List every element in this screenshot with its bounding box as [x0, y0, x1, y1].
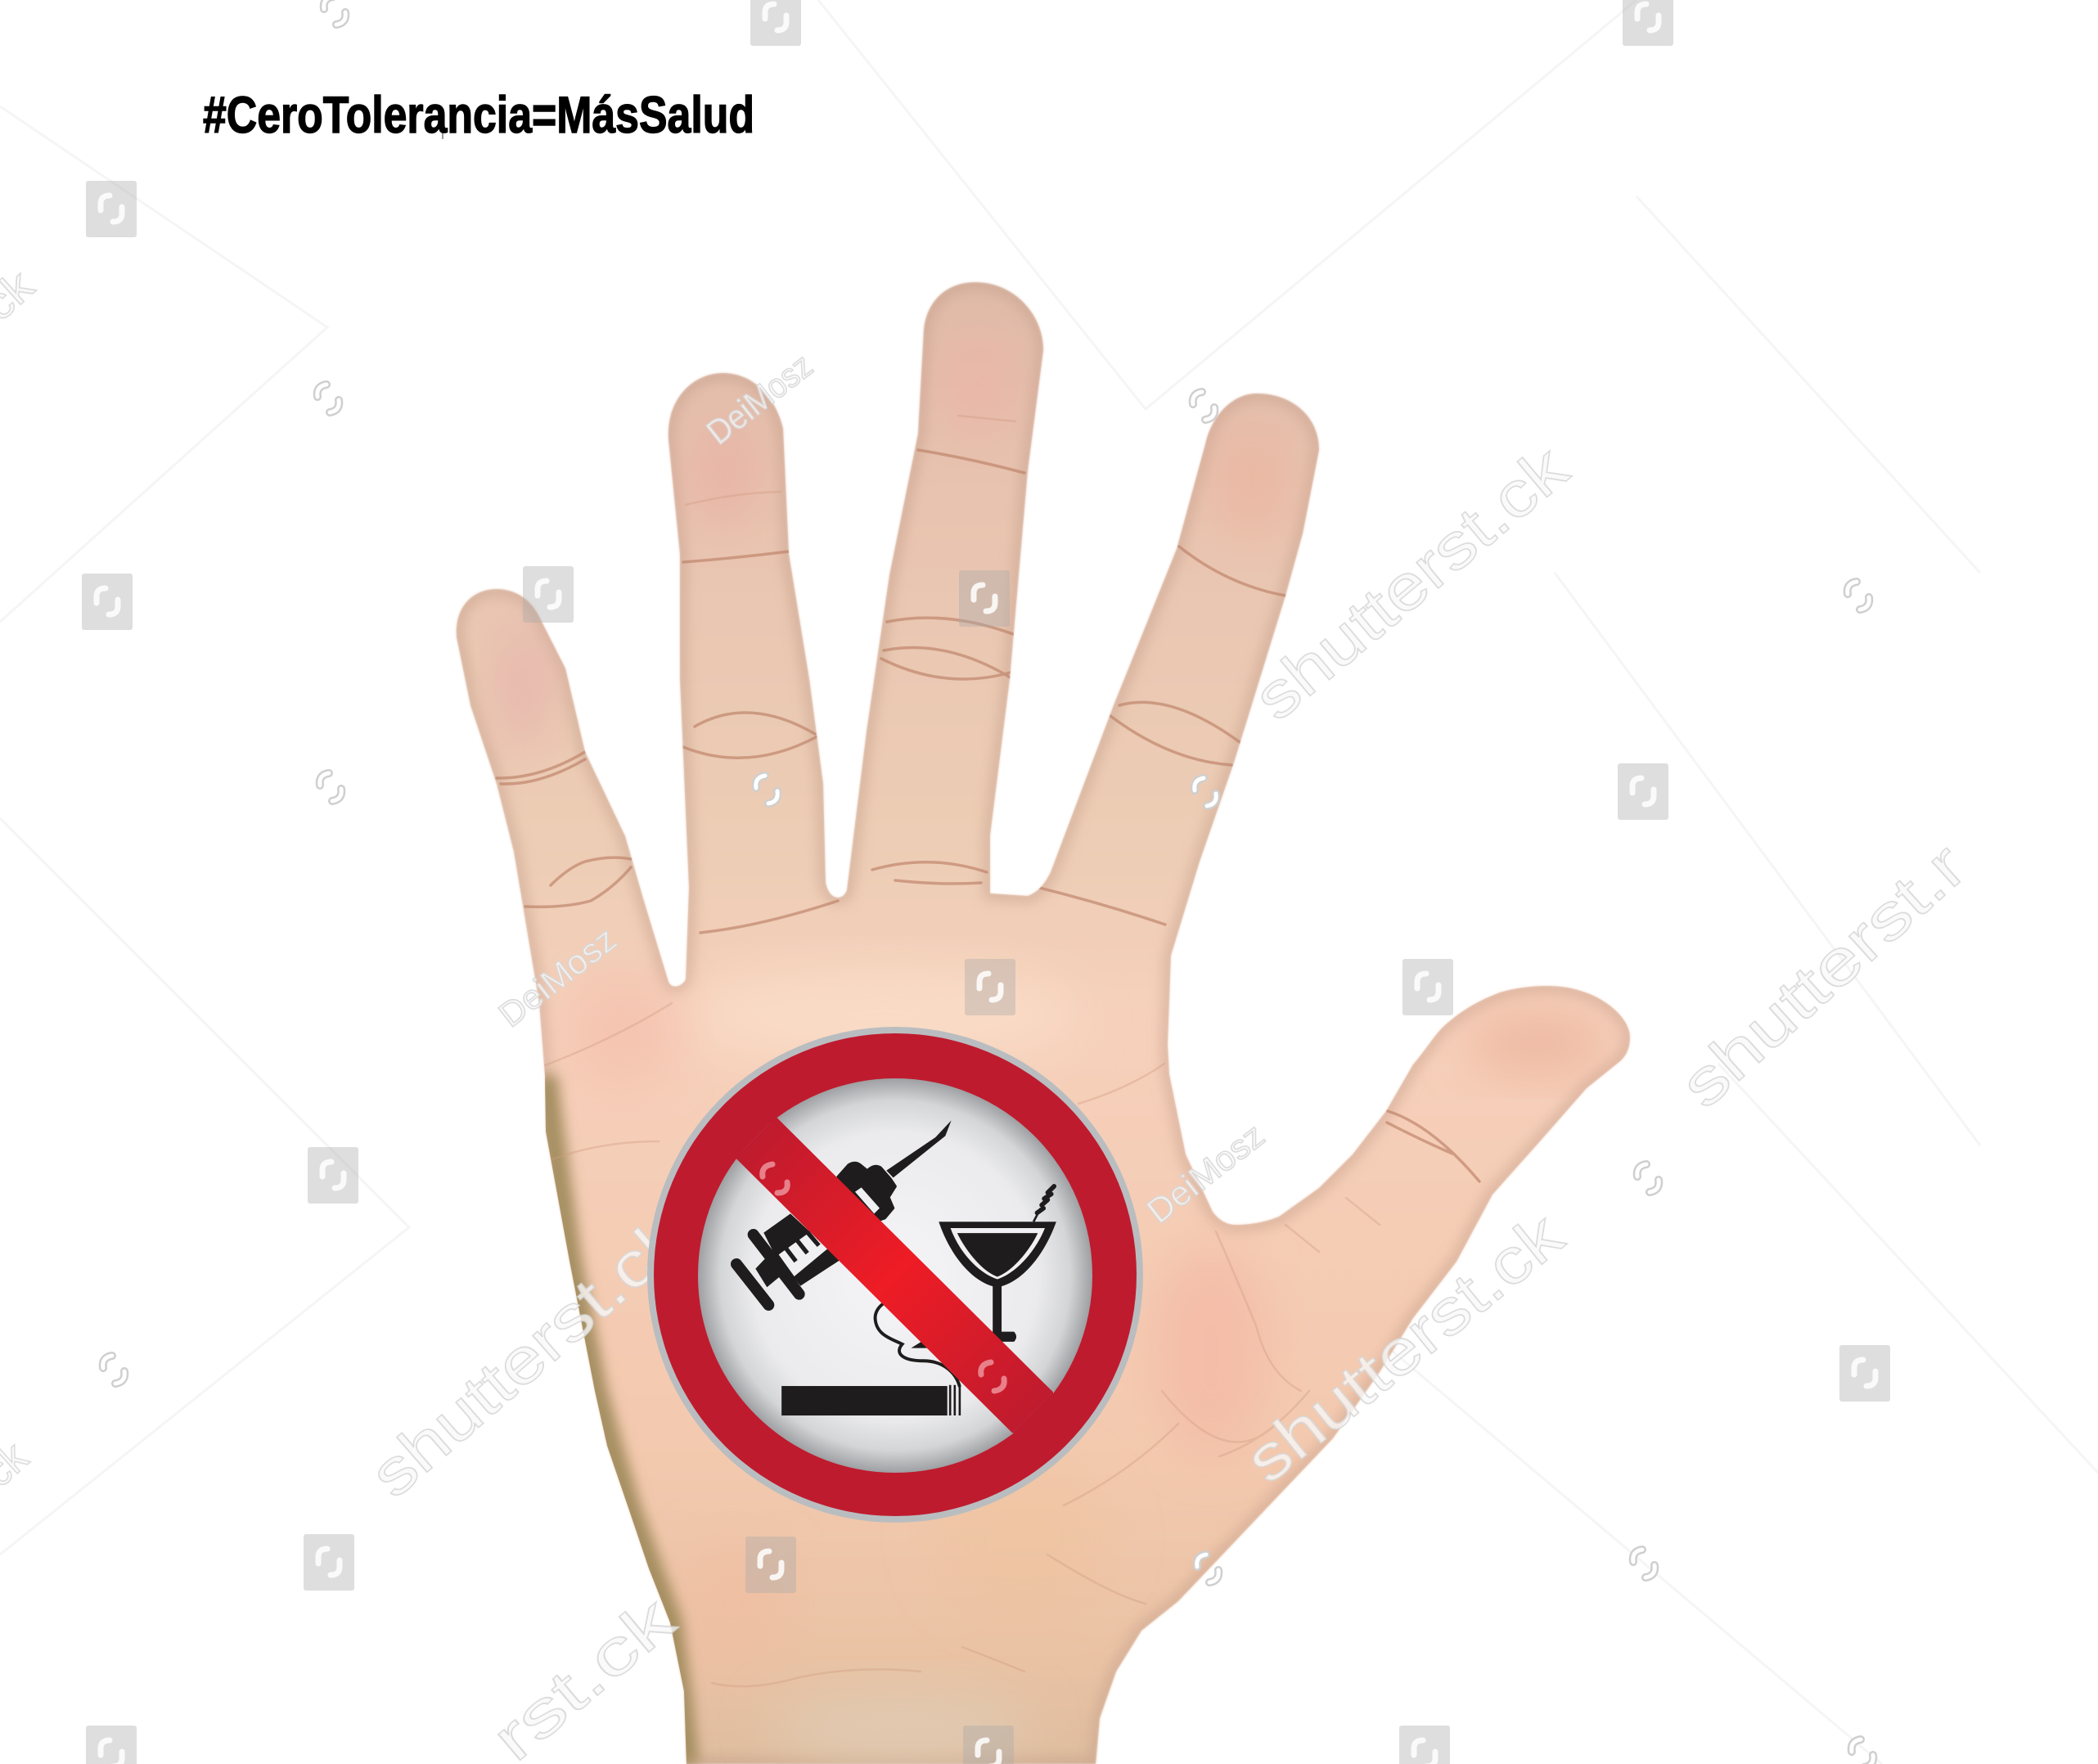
- finger creases: [497, 416, 1479, 1181]
- watermark: shutterstock text: DeiMosz: [492, 920, 624, 1034]
- watermark: shutterstock text: shutterst.ck: [356, 1200, 698, 1511]
- icon: cocktail glass: [939, 1186, 1056, 1342]
- watermark marks on sign: [763, 1164, 1004, 1391]
- sign ring: [647, 1027, 1143, 1523]
- watermark: shutterstock text: shutterst.ck: [1240, 431, 1582, 734]
- watermark: shutterstock text: shutterst.r: [1666, 829, 1979, 1122]
- hand: [457, 282, 1630, 1764]
- watermark: shutterstock text: DeiMosz: [1140, 1116, 1272, 1231]
- watermark: shutterstock text: shutterst.ck: [1231, 1198, 1577, 1496]
- sign diagonal bar: [728, 1117, 1058, 1442]
- title: #CeroTolerancia=MásSalud: [203, 87, 754, 144]
- prohibition sign: [647, 1027, 1143, 1523]
- icon: syringe: [736, 1120, 952, 1305]
- icon: cigarette: [781, 1303, 960, 1415]
- watermark: shutterstock text: DeiMosz: [700, 346, 820, 452]
- palm lines: [545, 1003, 1380, 1686]
